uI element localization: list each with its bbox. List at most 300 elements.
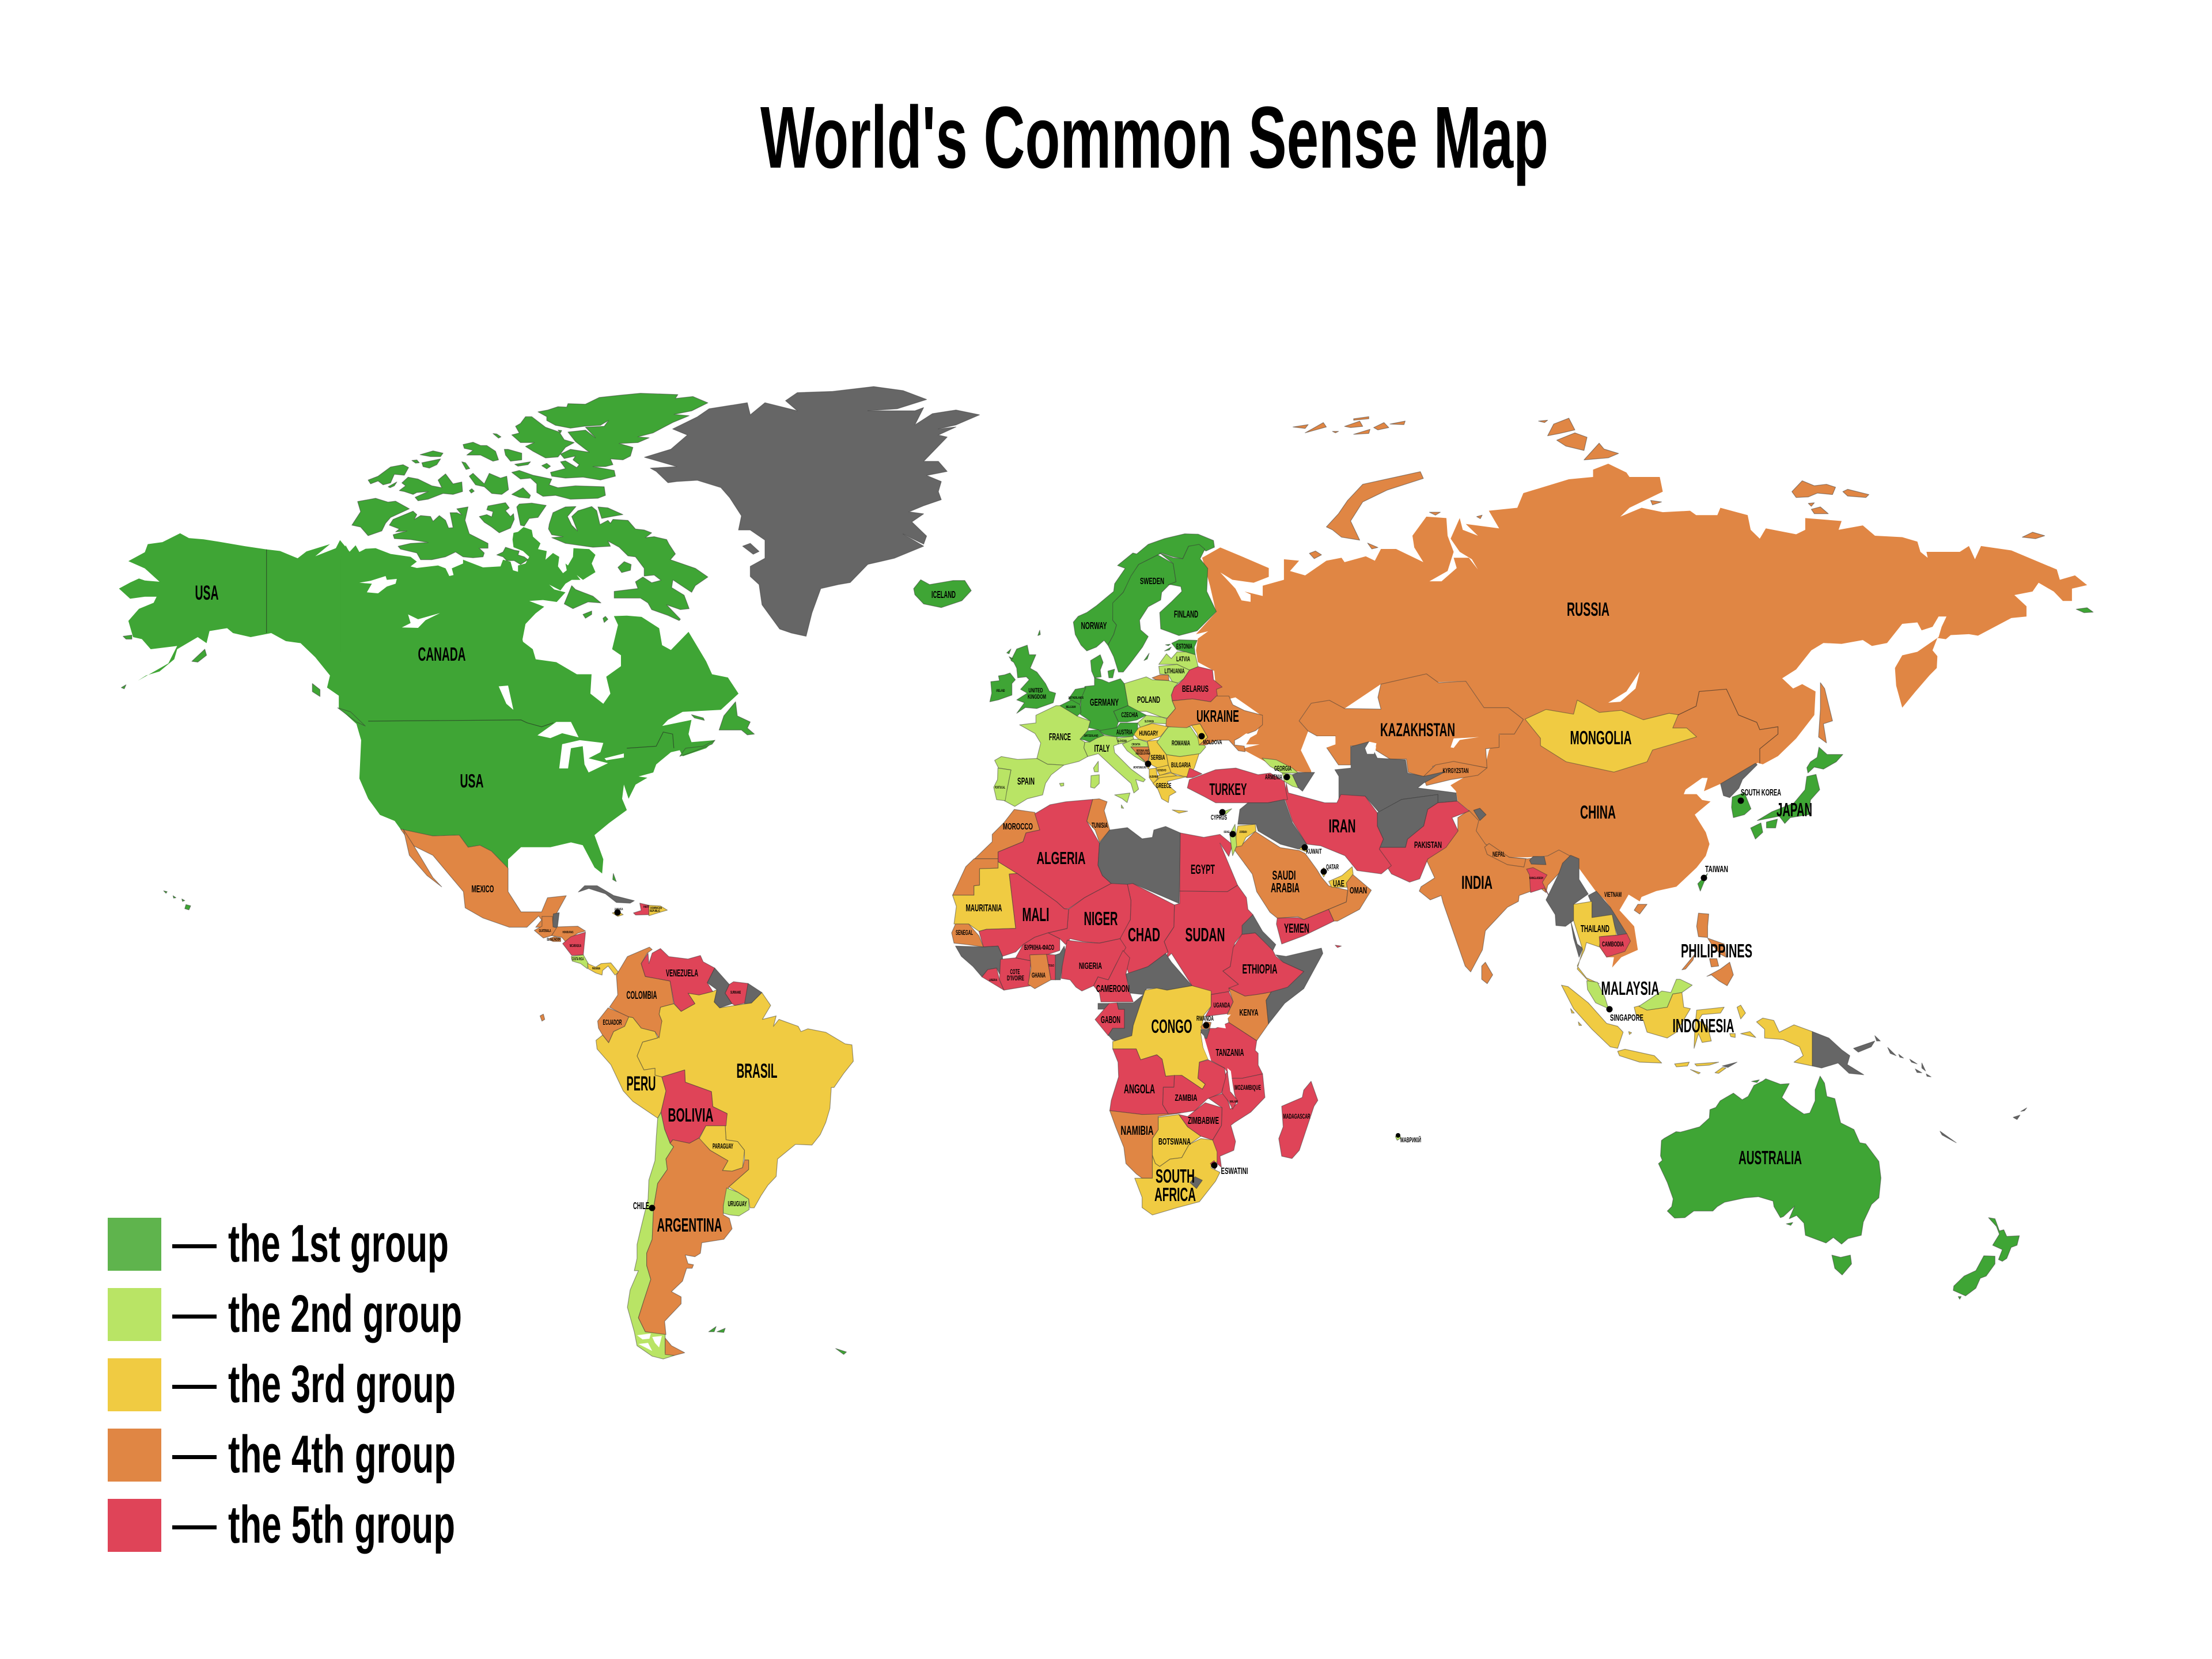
country labels: Africa and Middle East: MAURITANIA <box>965 902 1002 914</box>
Papua New Guinea and Solomon islands <box>1812 1032 1931 1077</box>
Burkina Faso <box>1016 933 1060 961</box>
country labels: Europe: CZECHIA <box>1121 711 1138 719</box>
Kosovo <box>1156 765 1171 776</box>
Latvia <box>1159 652 1198 670</box>
country labels: Asia and Oceania: NEPAL <box>1493 851 1505 858</box>
Myanmar peninsula <box>1571 921 1583 957</box>
legend: 5th group <box>108 1495 455 1554</box>
country labels: Americas: MEXICO <box>471 883 494 895</box>
Lake Baikal <box>1608 672 1640 703</box>
Balearic islands <box>1059 783 1064 786</box>
country labels: Americas <box>195 582 778 1236</box>
Lithuania <box>1159 664 1190 683</box>
Moldova <box>1191 724 1208 745</box>
Japan <box>1751 747 1843 839</box>
country labels: Americas: BRASIL <box>736 1060 778 1082</box>
Sri Lanka <box>1482 962 1493 984</box>
country labels: Europe: KOSOVO <box>1158 769 1166 772</box>
Atlantic Canada and Pacific islands <box>122 635 755 756</box>
Nicaragua <box>563 932 585 956</box>
Niger <box>1048 884 1131 945</box>
Georgia <box>1262 758 1298 773</box>
Lake Victoria <box>1215 1014 1231 1028</box>
title: World's Common Sense Map <box>760 89 1548 187</box>
Axel Heiberg Island <box>512 416 574 458</box>
country labels: Asia and Oceania: AUSTRALIA <box>1738 1147 1802 1168</box>
country labels: Africa and Middle East: SOUTH <box>1156 1165 1195 1187</box>
country labels: Americas: USA <box>460 770 484 791</box>
country labels: Africa and Middle East: KENYA <box>1240 1008 1259 1018</box>
legend: 4th group: the 4th group <box>228 1425 456 1484</box>
USA and Canada mainland <box>119 533 738 873</box>
country labels: Africa and Middle East: SUDAN <box>1185 924 1225 945</box>
Ellesmere Island <box>538 393 708 480</box>
Baltic islands <box>1144 644 1171 661</box>
Slovenia <box>1116 736 1134 744</box>
Norway <box>1073 534 1214 651</box>
South Africa <box>1135 1139 1220 1215</box>
Algeria <box>998 800 1111 909</box>
Guatemala <box>534 916 557 938</box>
Thailand <box>1574 902 1616 984</box>
country labels: Europe: HUNGARY <box>1139 730 1158 737</box>
country labels: Africa and Middle East: IRAN <box>1328 816 1356 836</box>
country labels: Europe: IRELAND <box>997 689 1005 693</box>
country labels: Asia and Oceania: KAZAKHSTAN <box>1380 719 1455 740</box>
country labels: Africa and Middle East: MALI <box>1022 904 1050 925</box>
Colombia <box>609 947 674 1038</box>
Devon Island <box>512 471 605 499</box>
Honduras <box>552 926 585 942</box>
Rwanda <box>1201 1021 1211 1029</box>
El Salvador <box>548 937 560 942</box>
legend: 4th group <box>108 1425 456 1484</box>
Russia mainland <box>1196 464 2087 774</box>
UAE <box>1329 867 1353 887</box>
Iran <box>1285 783 1391 874</box>
Haiti <box>634 903 649 915</box>
country labels: Africa and Middle East: NIGERIA <box>1079 961 1102 971</box>
Bangladesh <box>1527 868 1550 897</box>
Dominican Republic <box>649 905 668 916</box>
country labels: Europe: ROMANIA <box>1172 740 1190 747</box>
country labels: Africa and Middle East: ZIMBABWE <box>1188 1115 1219 1126</box>
Venezuela <box>641 949 715 1012</box>
Chile <box>627 1112 674 1359</box>
New Zealand north island <box>1988 1218 2020 1262</box>
Chad <box>1120 884 1175 974</box>
Sarawak and Sabah <box>1639 979 1692 1010</box>
country labels: Europe: CROATIA <box>1131 743 1141 747</box>
country labels: Asia and Oceania: JAPAN <box>1777 799 1812 820</box>
Myanmar <box>1546 855 1588 926</box>
country labels: Asia and Oceania: INDIA <box>1461 872 1493 893</box>
East Timor <box>1722 1062 1737 1067</box>
Syria and Iraq <box>1238 800 1306 849</box>
country labels: Asia and Oceania: PHILIPPINES <box>1681 940 1752 961</box>
Mozambique <box>1208 1074 1265 1168</box>
Tunisia <box>1087 799 1110 842</box>
Central Asia <box>1335 741 1457 813</box>
country labels: Europe: GERMANY <box>1090 696 1119 708</box>
Estonia <box>1172 640 1197 655</box>
country labels: Africa and Middle East: AFRICA <box>1154 1184 1196 1205</box>
country labels: Europe: MONTENEGRO <box>1134 766 1147 770</box>
map: Australia and New Zealand <box>1658 1076 2027 1299</box>
Oman <box>1329 874 1372 921</box>
country labels: Africa and Middle East: UGANDA <box>1213 1002 1230 1009</box>
Thrace <box>1187 768 1202 778</box>
country labels: Europe: ARMENIA <box>1265 774 1282 781</box>
country labels: Americas: PERU <box>627 1073 656 1095</box>
Argentina <box>638 1138 749 1335</box>
Hawaii and Bahamas <box>164 873 616 910</box>
legend: 2nd group <box>108 1285 462 1343</box>
Germany <box>1080 678 1128 730</box>
map: northern Canada and Arctic archipelago <box>340 393 708 652</box>
country labels: Europe: ITALY <box>1094 743 1110 754</box>
Mongolia <box>1525 700 1696 772</box>
Great Lakes and Lake Winnipeg <box>499 685 624 772</box>
Denmark <box>1090 655 1103 678</box>
Tierra del Fuego <box>665 1338 685 1355</box>
Baffin Island <box>548 506 708 620</box>
country labels: Europe: LATVIA <box>1176 656 1190 663</box>
United Kingdom <box>1011 645 1056 713</box>
country labels: Americas: CHILE <box>633 1200 649 1211</box>
Mauritania <box>953 862 1017 931</box>
Greenland <box>645 387 979 637</box>
St. Lawrence island <box>2076 608 2093 613</box>
Kyrgyzstan <box>1423 762 1487 786</box>
Uruguay <box>724 1188 749 1216</box>
northern Canadian mainland <box>340 527 596 652</box>
India <box>1419 810 1570 972</box>
Lesotho <box>1190 1177 1202 1188</box>
map: Kazakhstan and inner seas <box>1299 672 1778 804</box>
Guinea and Sierra Leone <box>956 946 1003 977</box>
Morocco <box>975 809 1040 859</box>
Benin <box>1055 946 1067 980</box>
Bhutan <box>1529 857 1546 865</box>
country labels: Asia and Oceania: MONGOLIA <box>1570 727 1631 748</box>
country labels: Europe: HERZEGOVINA <box>1136 752 1150 756</box>
North Macedonia <box>1158 773 1177 779</box>
Lake Tanganyika <box>1201 1033 1211 1060</box>
Aral Sea <box>1366 744 1376 756</box>
Sudan <box>1164 885 1253 995</box>
country labels: Europe: BOSNIA AND <box>1137 749 1149 753</box>
map: Europe <box>990 534 1263 813</box>
country labels: Americas: EL SALVADOR <box>547 938 560 942</box>
Australia <box>1658 1076 1881 1244</box>
Senegal <box>952 924 983 947</box>
Somalia <box>1266 948 1323 1024</box>
Madagascar <box>1279 1081 1318 1158</box>
country labels: Americas: USA <box>195 582 219 604</box>
King William Island <box>497 547 528 565</box>
Zambia <box>1162 1060 1226 1115</box>
Guyana <box>707 968 732 1008</box>
country labels: Africa and Middle East: ANGOLA <box>1124 1082 1155 1096</box>
British small islands <box>1007 630 1040 660</box>
country labels: Africa and Middle East: NAMIBIA <box>1121 1123 1154 1138</box>
country labels: Americas: PARAGUAY <box>713 1142 733 1150</box>
Banks Island <box>352 498 410 536</box>
country labels: Americas: ARGENTINA <box>657 1214 722 1236</box>
Aral Sea south <box>1365 741 1377 754</box>
country labels: Asia and Oceania: TAIWAN <box>1705 865 1728 874</box>
Kazakhstan <box>1299 674 1524 777</box>
Hungary <box>1134 724 1168 741</box>
France <box>1020 706 1090 765</box>
Israel <box>1230 824 1237 855</box>
Armenia <box>1282 773 1298 788</box>
country labels: Europe: LITHUANIA <box>1165 668 1185 675</box>
country labels: Americas: HONDURAS <box>562 931 574 934</box>
country labels: Africa and Middle East: KUWAIT <box>1306 848 1321 855</box>
Cambodia <box>1599 934 1631 957</box>
Ecuador <box>597 1008 629 1043</box>
country labels: Americas: CANADA <box>418 643 465 665</box>
Saudi Arabia <box>1233 831 1348 919</box>
country labels: Europe: SLOVAKIA <box>1145 720 1154 724</box>
Great Slave Lake <box>402 613 440 628</box>
country labels: Europe: AUSTRIA <box>1116 729 1132 736</box>
Gabon <box>1095 1003 1124 1036</box>
country labels: Americas: COSTA RICA <box>571 957 584 961</box>
country labels: Europe: UKRAINE <box>1196 707 1239 726</box>
Kenya <box>1228 988 1271 1041</box>
legend: 1st group <box>108 1214 449 1273</box>
Canada-USA borders <box>267 550 674 748</box>
country labels: Americas: REPUBLIC <box>650 910 660 913</box>
map: Africa and Arabia <box>952 799 1372 1215</box>
Kashmir <box>1474 808 1486 820</box>
legend: 2nd group: the 2nd group <box>228 1285 462 1343</box>
Sakhalin <box>1819 683 1832 743</box>
Greece <box>1153 776 1187 802</box>
Eritrea <box>1242 915 1276 950</box>
Kaliningrad <box>1152 675 1169 681</box>
country labels: Europe: BELGIUM <box>1066 706 1076 709</box>
country labels: Europe: SWITZERLAND <box>1084 734 1098 738</box>
country labels: Africa and Middle East: LIBERIA <box>989 979 997 982</box>
Burundi <box>1201 1029 1210 1039</box>
country labels: Asia and Oceania: SOUTH KOREA <box>1741 788 1781 798</box>
country labels: Asia and Oceania <box>1380 599 1812 1168</box>
country labels: Africa and Middle East: QATAR <box>1326 863 1339 871</box>
Central African Republic <box>1126 953 1192 995</box>
Cameroon <box>1093 950 1133 1002</box>
country labels: Europe: NETHERLANDS <box>1069 696 1084 700</box>
country labels: Europe: TURKEY <box>1210 781 1247 799</box>
New Caledonia and Fiji <box>1940 1108 2027 1143</box>
Finland <box>1160 544 1217 635</box>
Angola <box>1110 1049 1175 1115</box>
Austria <box>1099 723 1138 737</box>
Tanzania <box>1201 1022 1263 1078</box>
Pakistan <box>1379 801 1469 882</box>
Yemen <box>1277 910 1334 944</box>
country labels: Africa and Middle East: ESWATINI <box>1221 1166 1248 1176</box>
Serbia <box>1147 740 1168 768</box>
country labels: Europe: NORWAY <box>1081 620 1107 631</box>
country labels: Americas: ECUADOR <box>603 1018 622 1027</box>
country labels: Americas: NICARAGUA <box>570 944 581 948</box>
Ethiopia <box>1223 933 1304 996</box>
Eswatini <box>1210 1161 1217 1169</box>
Togo <box>1047 955 1055 980</box>
country labels: Europe: FINLAND <box>1174 608 1198 620</box>
country labels: Europe: MOLDOVA <box>1203 739 1222 746</box>
country labels: Africa and Middle East: TANZANIA <box>1215 1047 1244 1058</box>
country labels: Asia and Oceania: CHINA <box>1580 802 1616 823</box>
country labels: Africa and Middle East: MALAWI <box>1230 1100 1238 1104</box>
Tasmania <box>1832 1255 1851 1275</box>
Malaysia peninsula <box>1587 981 1608 1009</box>
Laos <box>1588 891 1627 935</box>
South Korea <box>1732 793 1751 817</box>
country labels: Europe: FRANCE <box>1049 731 1071 743</box>
Democratic Republic of Congo <box>1113 986 1211 1089</box>
legend <box>108 1214 462 1554</box>
Montenegro <box>1145 763 1151 769</box>
Zealand <box>1108 669 1115 678</box>
country labels: Americas: SURINAME <box>730 991 741 995</box>
North Korea <box>1721 763 1758 798</box>
Bosnia <box>1131 747 1150 763</box>
country labels: Africa and Middle East: NIGER <box>1084 908 1118 929</box>
country labels: Africa and Middle East: CAMEROON <box>1096 983 1130 994</box>
Cote d'Ivoire <box>999 958 1031 990</box>
country labels: Europe: BULGARIA <box>1171 762 1191 769</box>
country labels: Americas: HAITI <box>643 906 649 909</box>
legend: 1st group: the 1st group <box>228 1214 449 1273</box>
country labels: Africa and Middle East: CONGO <box>1151 1016 1192 1037</box>
country labels: Africa and Middle East: ISRAEL <box>1224 831 1230 834</box>
New Zealand south island <box>1953 1256 1995 1296</box>
Romania <box>1157 727 1206 756</box>
country labels: Americas: URUGUAY <box>728 1199 747 1208</box>
Taiwan <box>1698 873 1707 891</box>
Falklands and South Georgia <box>709 1327 846 1354</box>
Chilean fjord gaps <box>637 1334 662 1351</box>
Jordan <box>1234 824 1256 847</box>
country labels: Europe: ESTONIA <box>1176 643 1192 650</box>
country labels: Africa and Middle East: БУРКІНА-ФАСО <box>1024 943 1054 952</box>
Portugal <box>994 768 1011 801</box>
country labels: Africa and Middle East <box>956 814 1367 1205</box>
country labels: Americas: JAMAICA <box>614 908 623 911</box>
Western Sahara <box>953 859 998 895</box>
country labels: Asia and Oceania: RUSSIA <box>1567 599 1609 620</box>
Southampton Island <box>564 586 601 609</box>
country labels: Africa and Middle East: SAUDI <box>1272 868 1296 882</box>
country labels: Africa and Middle East: GHANA <box>1032 972 1046 979</box>
country labels: Africa and Middle East: ETHIOPIA <box>1242 961 1278 976</box>
country labels: Africa and Middle East: GABON <box>1101 1014 1120 1025</box>
country labels: Africa and Middle East: CHAD <box>1128 924 1160 945</box>
country labels: Africa and Middle East: MOZAMBIQUE <box>1234 1084 1261 1092</box>
Czechia <box>1113 706 1146 722</box>
Nepal <box>1484 843 1526 867</box>
Liberia <box>982 968 1004 990</box>
China <box>1450 709 1758 968</box>
Kalimantan <box>1634 993 1690 1038</box>
Bulgaria <box>1166 753 1199 778</box>
country labels: Africa and Middle East: EGYPT <box>1191 862 1215 877</box>
China-Russia border <box>1678 689 1778 763</box>
country labels: Asia and Oceania: MALAYSIA <box>1601 978 1659 999</box>
Afghanistan <box>1377 794 1438 847</box>
Albania <box>1149 768 1158 785</box>
Victoria Island <box>389 507 488 560</box>
country labels: Africa and Middle East: ARABIA <box>1271 880 1300 895</box>
country labels: Europe: GEORGIA <box>1274 765 1291 772</box>
country labels: Europe: KINGDOM <box>1028 694 1046 700</box>
country labels: Americas: PANAMA <box>592 967 600 971</box>
Caspian Sea <box>1301 736 1340 804</box>
Socotra <box>1335 945 1342 948</box>
country labels: Europe: SERBIA <box>1151 754 1165 762</box>
Great Bear Lake <box>359 576 397 593</box>
country labels: Asia and Oceania: МАВРИКІЙ <box>1400 1137 1421 1144</box>
country labels: Africa and Middle East: SENEGAL <box>956 929 973 937</box>
country labels: Asia and Oceania: INDONESIA <box>1673 1015 1734 1036</box>
Republic of Congo <box>1108 995 1143 1041</box>
Russian Arctic islands <box>1293 416 2045 559</box>
country labels: Africa and Middle East: ALGERIA <box>1037 849 1085 868</box>
Nigeria <box>1061 939 1126 991</box>
Sweden <box>1108 555 1176 672</box>
Italian and French islands <box>1090 762 1130 808</box>
Costa Rica <box>571 955 588 969</box>
country labels: Europe: ALBANIA <box>1150 775 1158 779</box>
country labels: Africa and Middle East: BOTSWANA <box>1158 1137 1191 1147</box>
Peru <box>596 1017 666 1118</box>
Turkey <box>1187 768 1287 803</box>
Philippines <box>1682 913 1733 986</box>
map: Middle East and Central Asia <box>1187 741 1469 882</box>
country labels: Europe: GREECE <box>1156 782 1172 790</box>
legend: 5th group: the 5th group <box>228 1495 455 1554</box>
country labels: Europe: POLAND <box>1137 695 1160 705</box>
Malawi <box>1222 1071 1237 1109</box>
Hainan <box>1634 904 1647 914</box>
country labels: Africa and Middle East: MOROCCO <box>1003 822 1033 832</box>
country labels: Europe: PORTUGAL <box>995 786 1005 790</box>
country labels: Americas: COLOMBIA <box>627 990 657 1002</box>
Egypt <box>1180 833 1237 892</box>
Mali <box>979 873 1069 956</box>
country labels: Asia and Oceania: THAILAND <box>1581 923 1609 934</box>
country labels: Africa and Middle East: MADAGASCAR <box>1283 1113 1310 1120</box>
Melville Island <box>399 474 463 501</box>
Botswana <box>1153 1115 1201 1166</box>
Belarus <box>1171 666 1222 702</box>
country labels: Asia and Oceania: BANGLADESH <box>1529 877 1543 880</box>
Indonesia islands <box>1562 985 1812 1074</box>
Lake Malawi <box>1228 1068 1234 1093</box>
Azerbaijan <box>1293 772 1315 791</box>
Sea of Azov <box>1234 733 1252 746</box>
country labels: Africa and Middle East: ZAMBIA <box>1175 1093 1198 1103</box>
legend: 3rd group <box>108 1355 456 1414</box>
Belize <box>552 912 559 927</box>
Ukraine <box>1166 696 1263 752</box>
country labels: Europe: UNITED <box>1029 687 1043 694</box>
